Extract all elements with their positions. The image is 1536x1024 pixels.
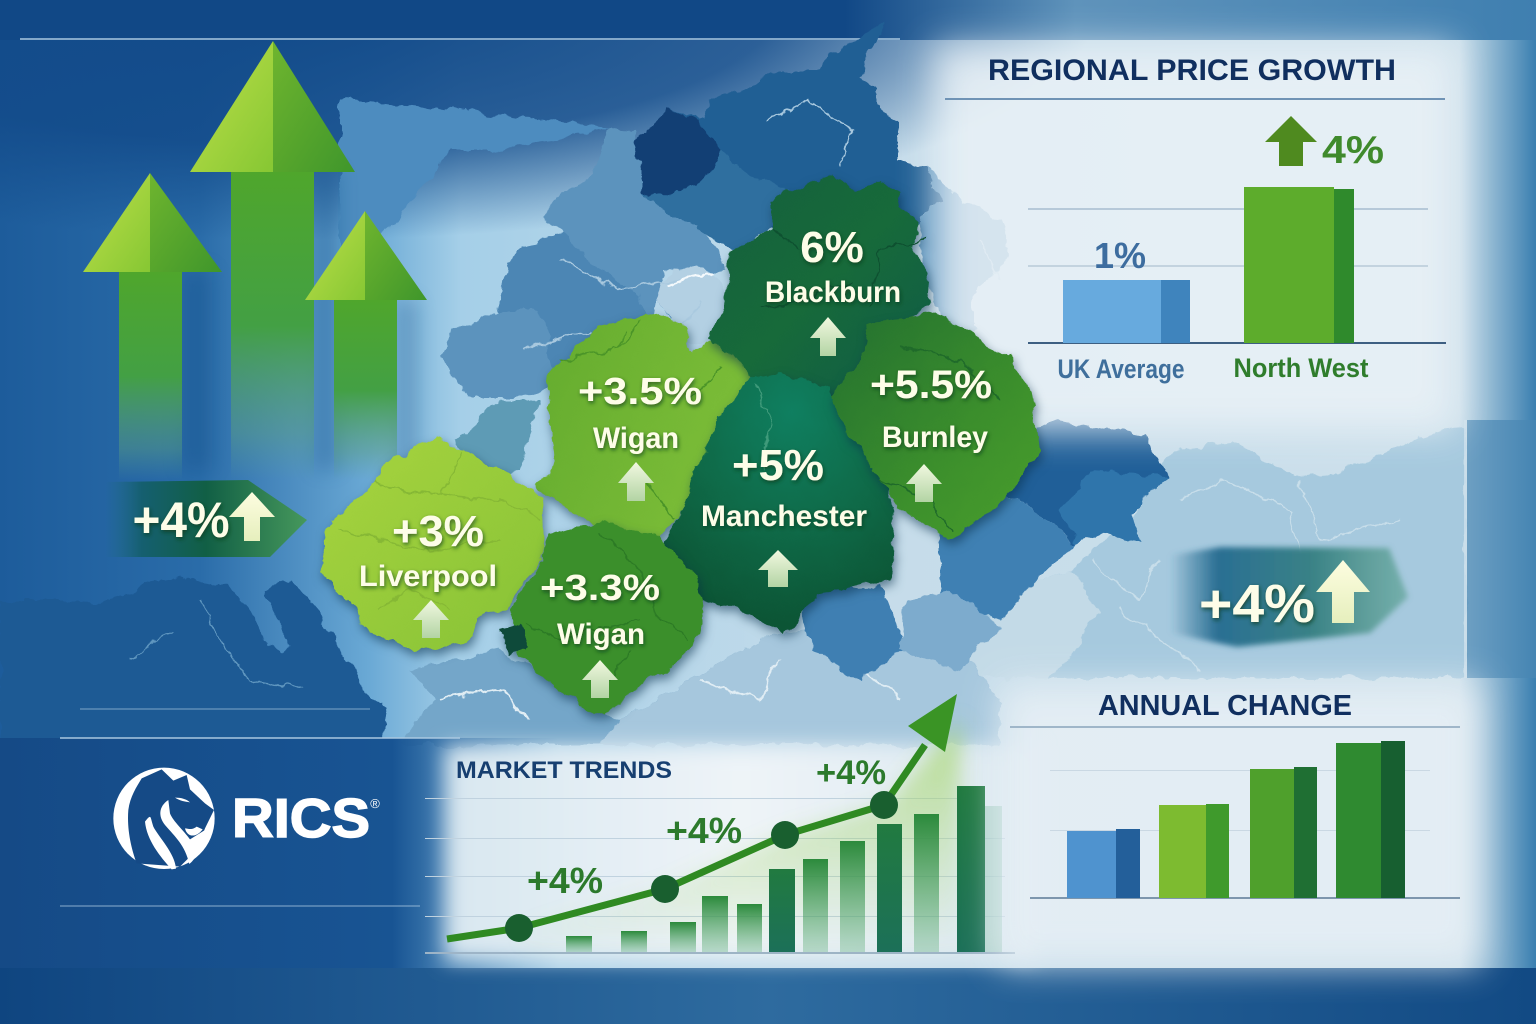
- arrow: left: [83, 173, 222, 480]
- region: Liverpool: Liverpool: [359, 560, 497, 593]
- panel: bottom bar: [0, 968, 1536, 1024]
- heading: annual change: ANNUAL CHANGE: [1098, 690, 1352, 722]
- region: Burnley: +5.5%: [870, 363, 992, 407]
- callout: +4% left: [105, 480, 307, 557]
- region: Liverpool: [321, 436, 545, 653]
- region: Manchester: +5%: [732, 441, 824, 490]
- region: Manchester: [665, 372, 895, 635]
- arrow: shadows: [182, 170, 417, 470]
- bar: North West: [1244, 187, 1354, 343]
- map: top left coast: [340, 100, 612, 260]
- arrow: centre: [190, 41, 355, 480]
- panel: market trends: [425, 694, 1035, 960]
- logo: RICS: [113, 768, 380, 869]
- panel: annual change: [1000, 684, 1480, 964]
- callout: +4% right: [1170, 547, 1408, 647]
- panel: logo area: [0, 738, 560, 970]
- callout: +4% right: +4%: [1199, 574, 1315, 634]
- map: right edge strip: [1467, 420, 1536, 678]
- region: Blackburn: [710, 175, 930, 400]
- heading: market trends: MARKET TRENDS: [456, 757, 672, 784]
- heading: regional price growth: REGIONAL PRICE GROWTH: [988, 54, 1396, 87]
- label: North West: North West: [1234, 353, 1368, 383]
- region: Burnley: [828, 313, 1040, 540]
- panel: regional price growth: [935, 46, 1455, 431]
- region: Wigan south: Wigan: [557, 618, 645, 651]
- region: Wigan north: [535, 313, 751, 537]
- region: Liverpool: +3%: [392, 507, 484, 556]
- map: lower middle land: [400, 620, 1000, 745]
- trend line with arrow: [447, 694, 957, 942]
- logo: RICS: RICS: [232, 787, 370, 849]
- region: Wigan south: [500, 522, 705, 715]
- map: blue regions: [442, 22, 1168, 680]
- label: +4% third: +4%: [816, 754, 886, 792]
- region: Blackburn: Blackburn: [765, 276, 901, 309]
- label: 4%: 4%: [1322, 129, 1384, 172]
- callout: +4% left: +4%: [132, 492, 230, 548]
- label: 1%: 1%: [1094, 235, 1146, 276]
- region: Wigan north: +3.5%: [578, 371, 702, 413]
- icon: up arrow: [1265, 116, 1317, 166]
- bar chart: annual: [1067, 741, 1405, 898]
- map: faint land right: [930, 425, 1465, 678]
- arrow: right: [305, 211, 427, 480]
- label: UK Average: UK Average: [1058, 354, 1184, 384]
- label: +4% first: +4%: [527, 860, 603, 901]
- icon: lion head: [113, 768, 215, 869]
- region: Wigan north: Wigan: [593, 422, 679, 455]
- region: Manchester: Manchester: [701, 500, 867, 533]
- glow under line: [520, 720, 960, 950]
- lines around logo panel: [60, 708, 460, 907]
- region: Wigan south: +3.3%: [540, 567, 660, 608]
- bar: UK average: [1063, 280, 1190, 343]
- line: vertical divider right: [1464, 420, 1467, 678]
- label: +4% second: +4%: [666, 810, 742, 851]
- logo: RICS: ®: [370, 796, 380, 811]
- region: Blackburn: 6%: [800, 223, 864, 272]
- region: Burnley: Burnley: [882, 421, 988, 454]
- map: lower left land: [0, 578, 387, 745]
- bar chart: [566, 786, 1002, 952]
